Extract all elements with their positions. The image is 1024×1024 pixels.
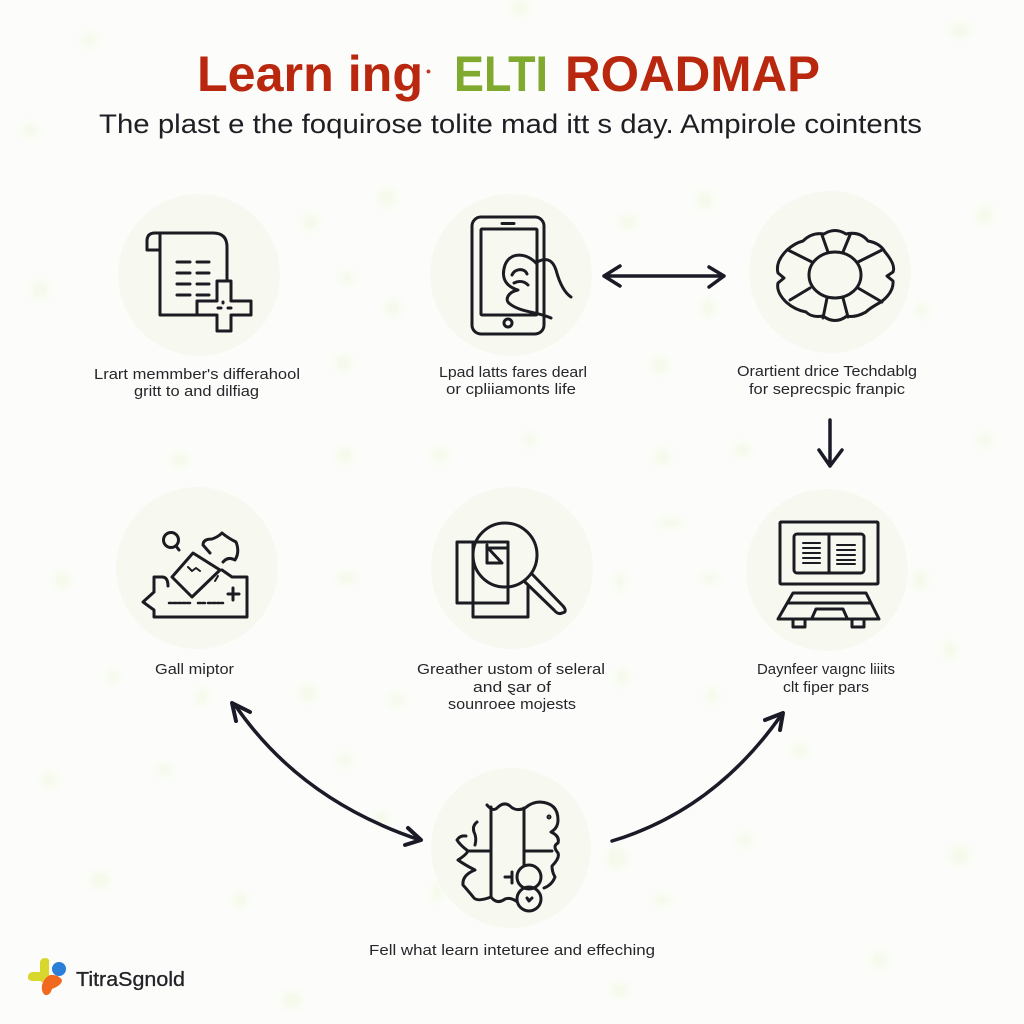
label: step 4: Gall miptor	[155, 661, 234, 678]
label: step 3: Orartient drice Techdablg	[737, 363, 917, 380]
step 6: laptop with book	[746, 489, 908, 696]
title: •	[426, 63, 431, 79]
label: step 6	[757, 661, 895, 696]
title	[197, 46, 820, 102]
label: step 5	[417, 661, 605, 713]
label: step 3: for seprecspic franpic	[749, 381, 906, 398]
label: step 5: and ȿar of	[473, 679, 552, 696]
icon: phone with hand	[472, 217, 571, 334]
arrow: down	[819, 420, 842, 466]
title: ELTI	[454, 46, 548, 102]
label: step 5: sounroee mojests	[448, 696, 576, 713]
arrow: curved left double	[232, 703, 421, 845]
label: step 7: Fell what learn inteturee and effeching	[369, 942, 655, 959]
label: step 6: clt fiper pars	[783, 679, 869, 696]
label: step 2: or cpliiamonts life	[446, 381, 576, 398]
icon: logo mark	[28, 958, 66, 995]
logo	[28, 958, 185, 995]
label: step 1: gritt to and dilfiag	[134, 383, 259, 400]
icon: map with magnifier and star	[143, 532, 247, 617]
step 7: wavy chart with figure	[369, 768, 655, 959]
logo text: TitraSgnold	[76, 969, 185, 991]
label: step 2	[439, 364, 587, 398]
label: step 1: Lrart memmber's differahool	[94, 366, 300, 383]
step 4: map with magnifier and star	[116, 487, 278, 678]
icon: laptop with book	[778, 522, 879, 627]
icon: document with plus	[147, 233, 251, 331]
label: step 5: Greather ustom of seleral	[417, 661, 605, 678]
step 2: phone with hand	[430, 194, 592, 398]
arrow: curved right	[612, 713, 783, 841]
title: ROADMAP	[565, 46, 820, 102]
label: step 2: Lpad latts fares dearl	[439, 364, 587, 381]
step 3: segmented ring	[737, 191, 917, 398]
icon: wavy chart with figure	[457, 802, 558, 911]
subtitle: The plast e the foquirose tolite mad itt s day. Ampirole cointents	[99, 109, 922, 139]
step 1: document with plus	[94, 194, 300, 400]
step 5: documents with magnifier	[417, 487, 605, 713]
icon: segmented ring	[777, 230, 894, 320]
title: Learn ing	[197, 46, 423, 102]
label: step 3	[737, 363, 917, 398]
arrow: double horizontal	[604, 266, 724, 287]
label: step 6: Daynfeer vaıgnc liiits	[757, 661, 895, 678]
icon: documents with magnifier	[457, 523, 565, 617]
label: step 1	[94, 366, 300, 400]
